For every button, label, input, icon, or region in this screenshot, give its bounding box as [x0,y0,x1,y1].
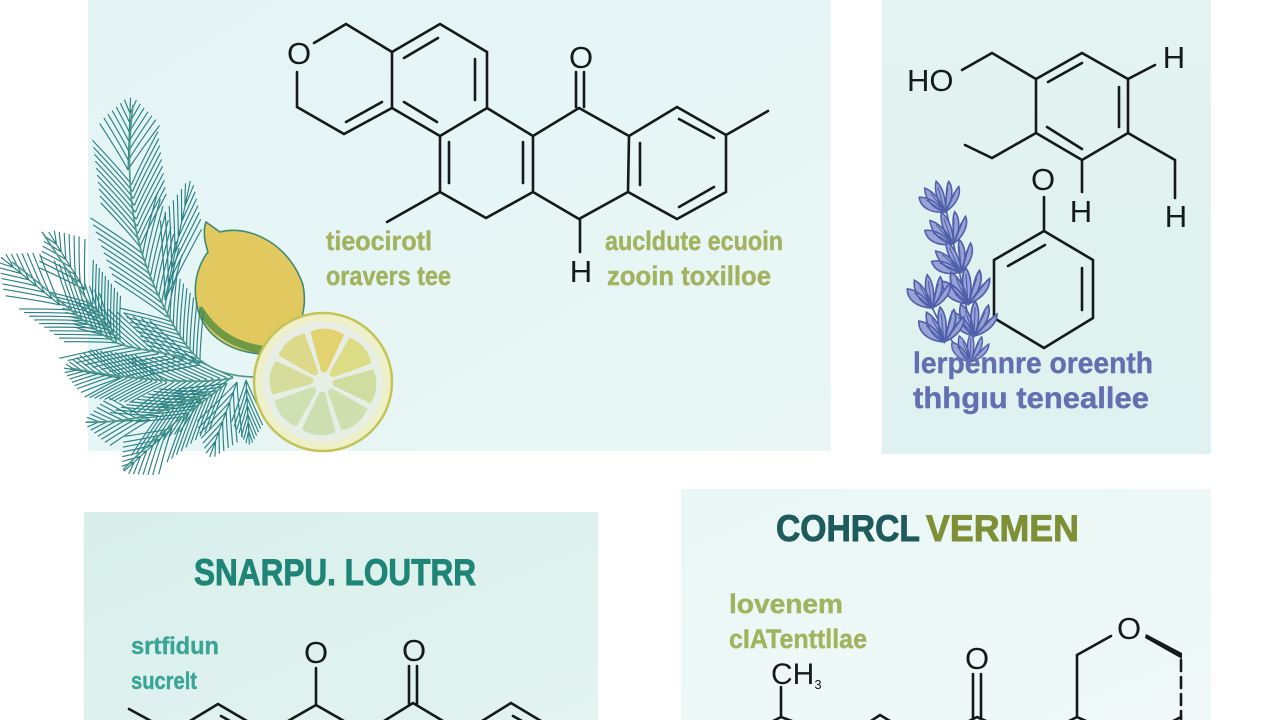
molecule: fused ring structure [287,24,768,289]
panel background [84,512,598,720]
icon: pine branch [0,97,266,490]
heading: bottom right [776,508,1079,549]
label: left molecule caption [326,226,451,291]
molecule: fused ring structure: O [287,36,311,71]
label: lavender caption: lerpennre oreenth [913,347,1153,380]
panel background [882,0,1211,454]
label: right molecule caption: aucldute ecuoin [605,226,783,256]
molecule: bottom right chain [771,611,1182,720]
panel: top left molecule [88,0,831,451]
heading: bottom right: VERMEN [926,508,1079,549]
molecule: upper benzene ring: HO [907,63,954,98]
molecule: upper benzene ring [907,40,1187,234]
label: bottom left caption: sucrelt [131,668,197,695]
label: bottom right caption [729,589,867,654]
molecule: lower ring with oxygen: O [1031,162,1055,197]
label: right molecule caption [605,226,783,291]
icon: lemon slice [254,313,392,451]
panel: bottom left molecule [84,512,598,720]
label: bottom right caption: lovenem [729,589,843,619]
panel background [681,489,1211,720]
panel: bottom right molecule [681,489,1211,720]
molecule: bottom right chain: CH [771,658,814,691]
label: left molecule caption: tieocirotl [326,226,432,256]
label: left molecule caption: oravers tee [326,261,451,291]
molecule: bottom right chain: O [965,641,989,676]
molecule: fused ring structure: H [570,254,592,289]
molecule: fused ring structure: O [569,40,593,75]
molecule: bottom left chain: O [402,633,426,668]
molecule: upper benzene ring: H [1163,40,1185,75]
molecule: bottom left chain: O [304,635,328,670]
label: bottom left caption: srtfidun [131,633,219,660]
label: lavender caption [913,347,1153,415]
heading: bottom left: SNARPU. LOUTRR [194,552,476,593]
panel background [88,0,831,451]
label: bottom left caption [131,633,219,695]
molecule: upper benzene ring: H [1165,199,1187,234]
icon: lavender sprig [905,175,997,362]
molecule: bottom right chain: 3 [814,677,822,692]
molecule: upper benzene ring: H [1070,194,1092,229]
label: bottom right caption: cIATenttllae [729,624,867,654]
heading: bottom right: COHRCL [776,508,920,549]
icon: lemon fruit [195,222,304,354]
panel: top right molecule [882,0,1211,454]
molecule: lower ring with oxygen [994,162,1093,348]
molecule: bottom right chain: O [1117,611,1141,646]
label: lavender caption: thhgıu teneallee [913,382,1149,415]
molecule: bottom left chain [129,633,541,720]
label: right molecule caption: zooin toxilloe [607,261,771,291]
